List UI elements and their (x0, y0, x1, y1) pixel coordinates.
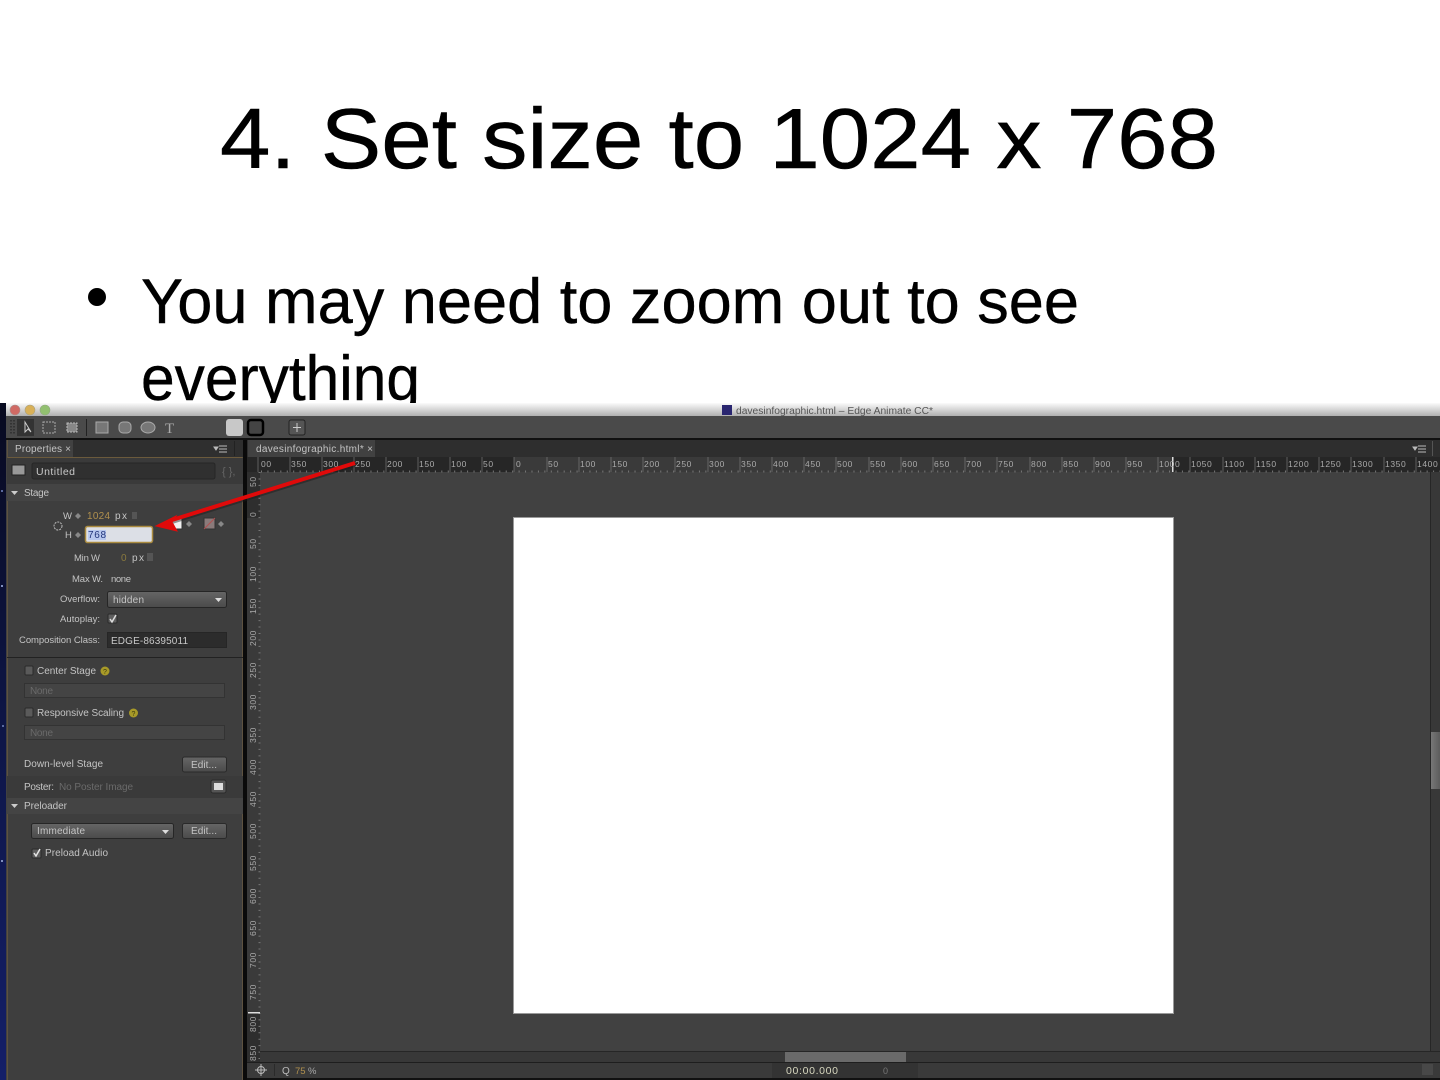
vertical ruler: 300 (248, 694, 258, 710)
horizontal ruler: 1000 (1159, 459, 1180, 469)
vertical ruler: 450 (248, 791, 258, 807)
horizontal ruler: 550 (870, 459, 886, 469)
application screenshot: Edge Animate window (0, 403, 1440, 1080)
horizontal ruler: 1300 (1352, 459, 1373, 469)
stage section header (7, 484, 243, 501)
horizontal ruler: 150 (612, 459, 628, 469)
status bar: % (308, 1066, 317, 1077)
vertical ruler: 0 (248, 512, 258, 517)
responsive scaling option (24, 708, 224, 740)
horizontal ruler: 600 (902, 459, 918, 469)
size fields: width and height (54, 511, 152, 542)
properties tab: Properties × (15, 444, 71, 455)
horizontal ruler: 50 (483, 459, 494, 469)
center stage option: ? (103, 669, 107, 676)
horizontal ruler: 750 (998, 459, 1014, 469)
overflow dropdown (60, 592, 226, 608)
horizontal ruler: 1150 (1256, 459, 1277, 469)
horizontal ruler: 900 (1095, 459, 1111, 469)
vertical ruler: 700 (248, 952, 258, 968)
horizontal ruler: 100 (580, 459, 596, 469)
autoplay checkbox: Autoplay: (60, 614, 100, 625)
title: 4. Set size to 1024 x 768 (220, 92, 1218, 187)
horizontal ruler: 300 (709, 459, 725, 469)
window title bar: davesinfographic.html – Edge Animate CC* (736, 406, 933, 417)
size fields: width and height: W (63, 511, 72, 522)
min and max width: Max W. (72, 574, 103, 585)
composition class field: Composition Class: (19, 635, 100, 646)
center stage option (24, 666, 224, 698)
poster row (7, 776, 243, 798)
vertical ruler: 200 (248, 630, 258, 646)
toolbar (6, 416, 1440, 440)
preloader section header: Preloader (24, 801, 68, 812)
horizontal ruler: 1350 (1385, 459, 1406, 469)
responsive scaling option: None (30, 728, 53, 739)
preloader controls: Immediate (37, 826, 85, 837)
horizontal ruler: 400 (773, 459, 789, 469)
composition class field: EDGE-86395011 (111, 636, 188, 647)
size fields: width and height: H (65, 530, 72, 541)
status bar: 75 (295, 1066, 306, 1077)
horizontal ruler: 1400 (1417, 459, 1438, 469)
preloader controls (32, 824, 226, 859)
min and max width: Min W (74, 553, 100, 564)
status bar: 0 (883, 1066, 888, 1076)
horizontal ruler: 0 (516, 459, 521, 469)
vertical ruler: 650 (248, 920, 258, 936)
horizontal ruler: 50 (548, 459, 559, 469)
min and max width: 0 (121, 553, 127, 564)
vertical ruler: 350 (248, 727, 258, 743)
min and max width: none (111, 574, 131, 585)
properties panel (7, 440, 243, 1080)
size fields: width and height: px (115, 511, 127, 522)
composition name row: Untitled (36, 466, 75, 478)
status bar: 00:00.000 (786, 1065, 838, 1077)
window title bar (0, 403, 1440, 417)
vertical ruler: 400 (248, 759, 258, 775)
composition name row (7, 458, 243, 484)
vertical ruler: 100 (248, 566, 258, 582)
vertical ruler: 850 (248, 1045, 258, 1061)
horizontal ruler: 250 (355, 459, 371, 469)
horizontal ruler: 950 (1127, 459, 1143, 469)
toolbar: T (165, 421, 174, 437)
document tab bar (247, 440, 1440, 457)
vertical ruler: 150 (248, 598, 258, 614)
size fields: width and height: 768 (88, 530, 106, 541)
status bar: Q (282, 1066, 290, 1077)
horizontal ruler: 350 (741, 459, 757, 469)
horizontal ruler: 500 (837, 459, 853, 469)
horizontal ruler: 00 (261, 459, 272, 469)
horizontal ruler: 1200 (1288, 459, 1309, 469)
horizontal ruler: 1250 (1320, 459, 1341, 469)
preloader controls: Preload Audio (45, 848, 108, 859)
horizontal ruler: 1050 (1191, 459, 1212, 469)
preloader controls: Edit... (191, 826, 217, 837)
center stage option: None (30, 686, 53, 697)
down-level stage row: Edit... (191, 760, 217, 771)
center stage option: Center Stage (37, 666, 96, 677)
poster row: Poster: (24, 782, 54, 793)
red arrow pointing to height field (156, 463, 355, 531)
vertical ruler: 600 (248, 888, 258, 904)
horizontal ruler: 1100 (1224, 459, 1245, 469)
horizontal ruler: 200 (644, 459, 660, 469)
vertical ruler: 50 (248, 538, 258, 549)
responsive scaling option: Responsive Scaling (37, 708, 124, 719)
bullet text block (88, 267, 1079, 414)
overflow dropdown: Overflow: (60, 594, 100, 605)
bullet text block: You may need to zoom out to see (141, 267, 1079, 337)
min and max width (72, 553, 153, 585)
status bar (247, 1062, 1440, 1080)
horizontal ruler: 150 (419, 459, 435, 469)
composition class field (19, 632, 226, 648)
poster row: No Poster Image (59, 782, 133, 793)
bullet text block: everything (141, 344, 420, 414)
vertical ruler: 800 (248, 1016, 258, 1032)
horizontal scrollbar (260, 1051, 1440, 1063)
horizontal ruler: 350 (291, 459, 307, 469)
colour swatches (171, 518, 224, 529)
horizontal ruler: 650 (934, 459, 950, 469)
vertical ruler: 550 (248, 855, 258, 871)
horizontal ruler: 300 (323, 459, 339, 469)
horizontal ruler: 100 (451, 459, 467, 469)
horizontal ruler (247, 457, 1440, 472)
white stage canvas (514, 518, 1174, 1014)
responsive scaling option: ? (132, 711, 136, 718)
overflow dropdown: hidden (113, 595, 144, 606)
down-level stage row: Down-level Stage (24, 759, 103, 770)
horizontal ruler: 200 (387, 459, 403, 469)
vertical ruler: 50 (248, 476, 258, 487)
panel divider (243, 440, 247, 1080)
vertical ruler: 250 (248, 662, 258, 678)
horizontal ruler: 250 (676, 459, 692, 469)
desktop edge (0, 403, 6, 1080)
min and max width: px (132, 553, 144, 564)
composition name row: { }, (222, 466, 235, 478)
properties tab (8, 440, 227, 457)
horizontal ruler: 850 (1063, 459, 1079, 469)
vertical ruler: 750 (248, 984, 258, 1000)
stage section header: Stage (24, 488, 49, 499)
horizontal ruler: 700 (966, 459, 982, 469)
vertical ruler (247, 472, 260, 1062)
document tab bar: davesinfographic.html* × (256, 444, 373, 455)
vertical scrollbar (1430, 472, 1440, 1062)
size fields: width and height: 1024 (87, 511, 110, 522)
down-level stage row (24, 757, 226, 772)
preloader section header (7, 798, 243, 814)
vertical ruler: 500 (248, 823, 258, 839)
horizontal ruler: 450 (805, 459, 821, 469)
horizontal ruler: 800 (1031, 459, 1047, 469)
